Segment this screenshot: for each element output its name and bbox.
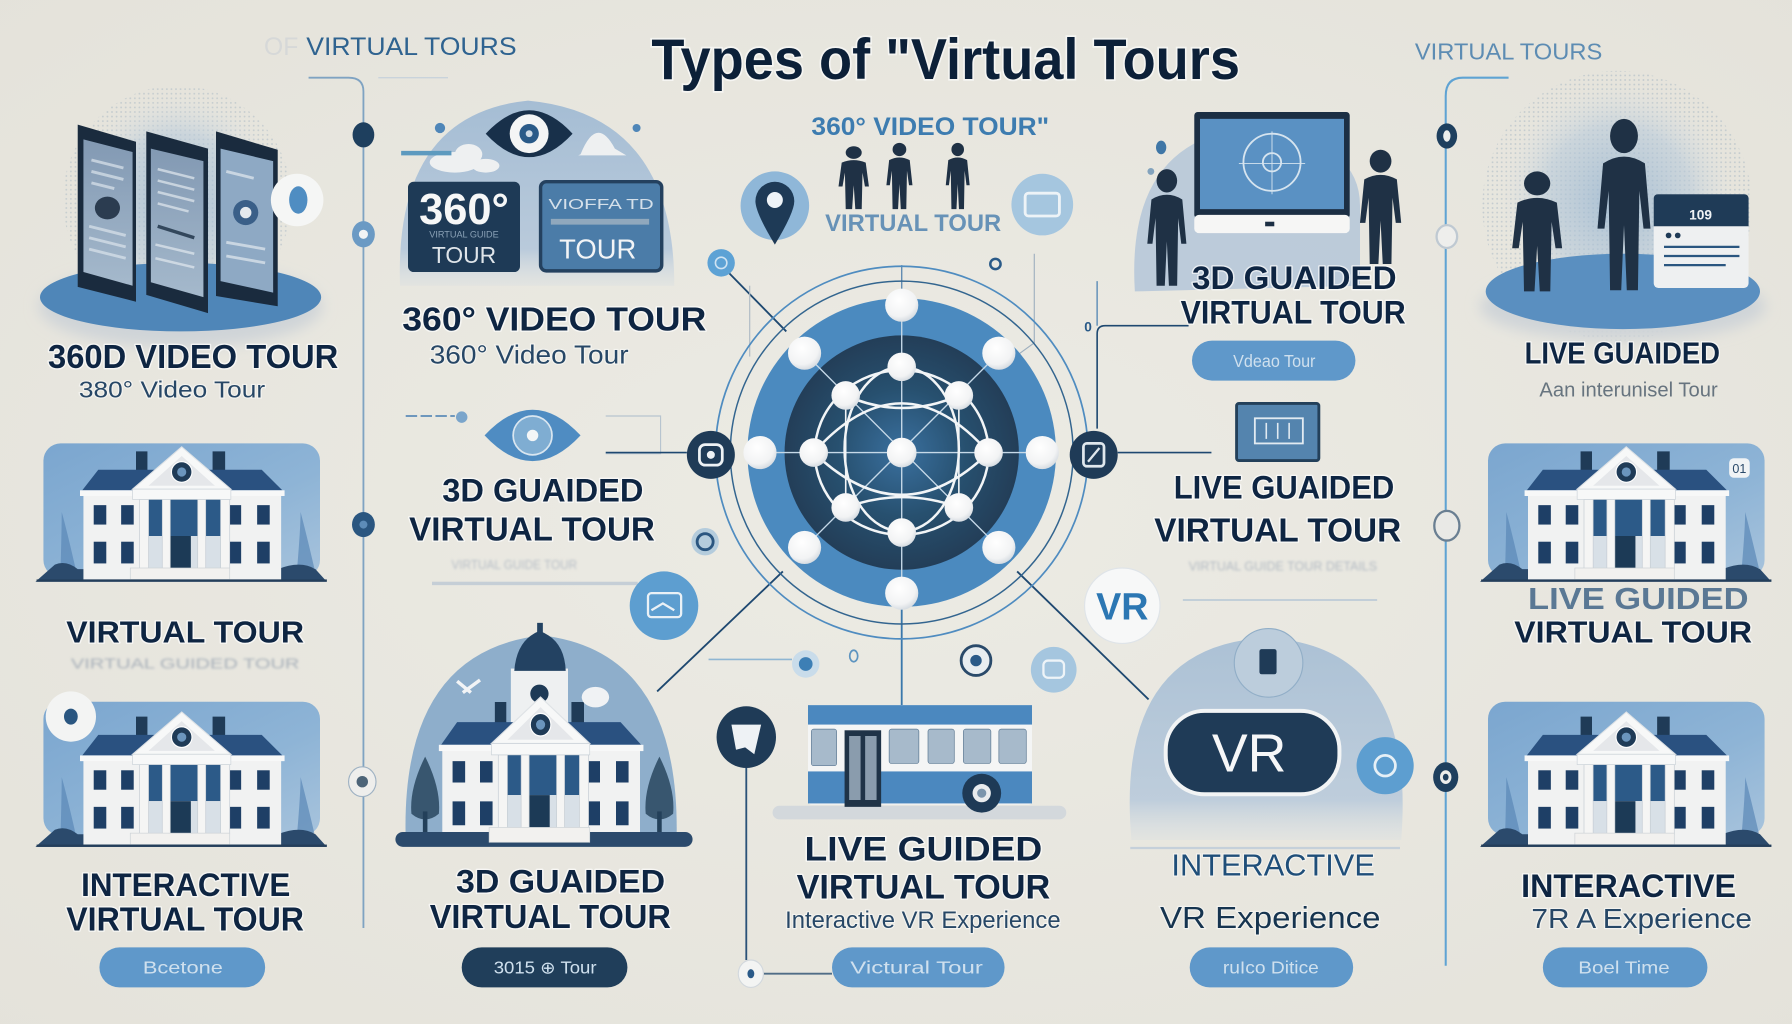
icon: blue circle <box>630 571 698 640</box>
heading: 3D guided top right: VIRTUAL TOUR <box>1181 294 1406 330</box>
heading: 3D guided middle left: 3D GUAIDED <box>442 473 643 509</box>
heading: 3D guided top right <box>1181 260 1406 330</box>
heading: 3D guided bottom: 3D GUAIDED <box>456 864 665 900</box>
button: right: Boel Time <box>1578 958 1670 978</box>
card: 360: TOUR <box>432 242 496 268</box>
icon: map pin <box>741 171 809 245</box>
windows <box>811 729 1026 766</box>
timeline node 3 <box>1434 511 1459 541</box>
icon: dark ring <box>961 646 991 675</box>
button: VR: ruIco Ditice <box>1223 958 1319 978</box>
tower <box>511 623 568 726</box>
heading: live guided right: LIVE GUAIDED <box>1525 335 1720 370</box>
icon: badge <box>46 691 96 742</box>
heading: left interactive: VIRTUAL TOUR <box>66 901 304 938</box>
info card: 109 <box>1689 207 1712 222</box>
heading: 3D guided bottom: VIRTUAL TOUR <box>430 899 671 936</box>
heading: left 360 video: 360D VIDEO TOUR <box>48 339 338 376</box>
heading: left 360 video <box>48 339 338 403</box>
icon: small tag <box>1729 458 1750 478</box>
panel: left mansion 2 <box>35 691 327 847</box>
icon: small ring top right <box>990 259 1001 269</box>
card: 360 <box>408 182 520 272</box>
heading: left interactive: INTERACTIVE <box>81 867 290 903</box>
left timeline <box>309 78 448 928</box>
timeline node 2 <box>1437 225 1457 248</box>
panel: dome mansion <box>395 623 693 847</box>
heading: live guided bottom: VIRTUAL TOUR <box>797 868 1051 906</box>
inner nodes <box>799 353 1003 547</box>
heading: 3D guided top right: 3D GUAIDED <box>1192 260 1397 296</box>
label marker: 0 <box>1084 319 1092 334</box>
icon: ring <box>850 650 858 662</box>
heading: live guided middle right: VIRTUAL GUIDE TOUR DETAILS <box>1189 559 1377 573</box>
timeline node 4 <box>1433 762 1458 792</box>
button: video tour <box>1192 341 1355 381</box>
heading: 3D guided middle left <box>409 473 655 585</box>
heading: left interactive <box>66 867 304 938</box>
button: virtual tour: Victural Tour <box>850 958 983 978</box>
connectors <box>606 254 1211 705</box>
heading: left virtual tour: VIRTUAL GUIDED TOUR <box>71 657 300 673</box>
panel: 360 cards <box>400 101 674 286</box>
phone 1 <box>78 125 136 302</box>
heading: left virtual tour <box>66 614 304 673</box>
heading: live guided bottom: LIVE GUIDED <box>805 831 1042 869</box>
header label: left: VIRTUAL TOURS <box>306 33 517 61</box>
center top label <box>811 113 1049 237</box>
right timeline <box>1433 78 1509 966</box>
center top label: VIRTUAL TOUR <box>825 210 1001 237</box>
timeline node 1 <box>353 122 374 147</box>
heading: live guided middle right: LIVE GUAIDED <box>1174 469 1394 505</box>
heading: live guided virtual tour right <box>1514 581 1752 649</box>
icon: badge <box>271 174 323 226</box>
heading: interactive VR: INTERACTIVE <box>1171 847 1375 882</box>
heading: live guided right: Aan interunisel Tour <box>1539 379 1718 402</box>
dome <box>400 101 674 286</box>
card: 360: VIRTUAL GUIDE <box>429 230 499 240</box>
panel: left mansion 1 <box>35 443 327 582</box>
icon: small node top left <box>707 249 735 277</box>
timeline node: bus <box>738 960 832 987</box>
card: tour <box>541 182 662 271</box>
icon: left badge <box>687 431 735 479</box>
icon: screen circle <box>1011 174 1073 235</box>
heading: interactive right <box>1521 868 1752 934</box>
heading: interactive VR <box>1160 847 1381 935</box>
wheel <box>962 774 1001 813</box>
icon: right badge <box>1070 431 1118 479</box>
heading: live guided middle right <box>1154 469 1401 573</box>
heading: 3D guided middle left: VIRTUAL GUIDE TOUR <box>451 558 577 572</box>
trees <box>411 757 673 841</box>
timeline node 3 <box>352 512 375 537</box>
phone 2 <box>146 131 208 313</box>
icon: small screen <box>1237 403 1319 461</box>
heading: live guided bottom: Interactive VR Experience <box>785 907 1061 934</box>
heading: live guided virtual tour right: VIRTUAL TOUR <box>1514 614 1752 649</box>
people <box>839 143 970 209</box>
icon: pale circle <box>1031 647 1077 693</box>
icon: blue eye <box>406 410 661 461</box>
small pins <box>435 123 641 133</box>
small icons row <box>709 646 1077 693</box>
panel: right mansion 2 <box>1480 702 1771 847</box>
heading: 360 video tour: 360° VIDEO TOUR <box>402 301 706 338</box>
dark core <box>785 335 1019 570</box>
button: left <box>99 947 265 987</box>
button: virtual tour <box>832 947 1005 987</box>
card: tour: TOUR <box>559 233 636 264</box>
guide 2 <box>1598 119 1650 290</box>
panel: phones <box>39 86 323 347</box>
icon: small ring left <box>691 528 719 555</box>
heading: 360 video tour <box>402 301 706 369</box>
icon: ring top <box>1234 629 1303 697</box>
panel: live guides <box>1480 71 1766 341</box>
header label: right: VIRTUAL TOURS <box>1415 38 1602 64</box>
heading: 3D guided bottom <box>430 864 671 936</box>
VR badge <box>1085 568 1377 643</box>
button: VR <box>1190 947 1353 987</box>
network curves <box>814 367 989 535</box>
central network diagram <box>715 266 1088 639</box>
timeline node 4 <box>349 767 376 797</box>
bus body <box>808 705 1032 805</box>
guide left <box>1147 169 1186 286</box>
heading: left virtual tour: VIRTUAL TOUR <box>66 614 304 649</box>
button: right <box>1543 947 1707 987</box>
door <box>845 730 881 807</box>
outer nodes <box>743 289 1059 610</box>
bus shadow <box>773 806 1066 819</box>
icon: small tag: 01 <box>1732 462 1746 476</box>
heading: live guided virtual tour right: LIVE GUIDED <box>1528 581 1749 616</box>
icon: eye <box>486 110 573 157</box>
platform <box>1486 254 1760 329</box>
panel: monitor with guides <box>1134 112 1401 291</box>
heading: interactive right: 7R A Experience <box>1531 903 1752 934</box>
guide right <box>1360 150 1401 264</box>
VR headset <box>1166 711 1339 794</box>
button: video tour: Vdeao Tour <box>1233 351 1316 371</box>
icon: bus badge <box>717 706 776 960</box>
button: dark: 3015 ⊕ Tour <box>494 958 597 978</box>
heading: 3D guided middle left: VIRTUAL TOUR <box>409 512 655 549</box>
phone 3 <box>216 131 278 306</box>
center top label: 360° VIDEO TOUR" <box>811 113 1049 141</box>
button: dark <box>462 947 627 987</box>
title: Types of "Virtual Tours <box>651 28 1240 92</box>
VR badge: VR <box>1096 585 1148 627</box>
VR headset: VR <box>1212 723 1286 783</box>
blue ring <box>747 298 1056 607</box>
info card <box>1654 194 1749 288</box>
button: left: Bcetone <box>143 958 223 978</box>
heading: live guided middle right: VIRTUAL TOUR <box>1154 513 1401 550</box>
panel: VR dome <box>1130 629 1414 848</box>
heading: 360 video tour: 360° Video Tour <box>430 339 629 369</box>
heading: live guided right <box>1525 335 1720 402</box>
outer rings <box>715 266 1088 639</box>
ground <box>395 832 693 847</box>
clouds <box>430 133 626 173</box>
panel: bus <box>773 705 1066 819</box>
icon: blue circle <box>1357 737 1414 794</box>
timeline node 2 <box>352 221 375 247</box>
heading: left 360 video: 380° Video Tour <box>79 377 266 403</box>
icon: blue dot <box>709 650 819 678</box>
panel: right mansion 1 <box>1480 443 1771 582</box>
heading: live guided bottom <box>785 831 1061 934</box>
card: 360: 360° <box>419 186 509 234</box>
monitor <box>1194 112 1350 233</box>
guide 1 <box>1512 171 1562 291</box>
platform <box>40 263 321 331</box>
heading: interactive right: INTERACTIVE <box>1521 868 1736 904</box>
spokes <box>760 305 1042 593</box>
card: tour: VIOFFA TD <box>549 197 654 213</box>
header label: left: OF <box>264 33 298 61</box>
timeline node 1 <box>1437 123 1457 149</box>
pins <box>1147 141 1166 175</box>
heading: interactive VR: VR Experience <box>1160 900 1381 935</box>
